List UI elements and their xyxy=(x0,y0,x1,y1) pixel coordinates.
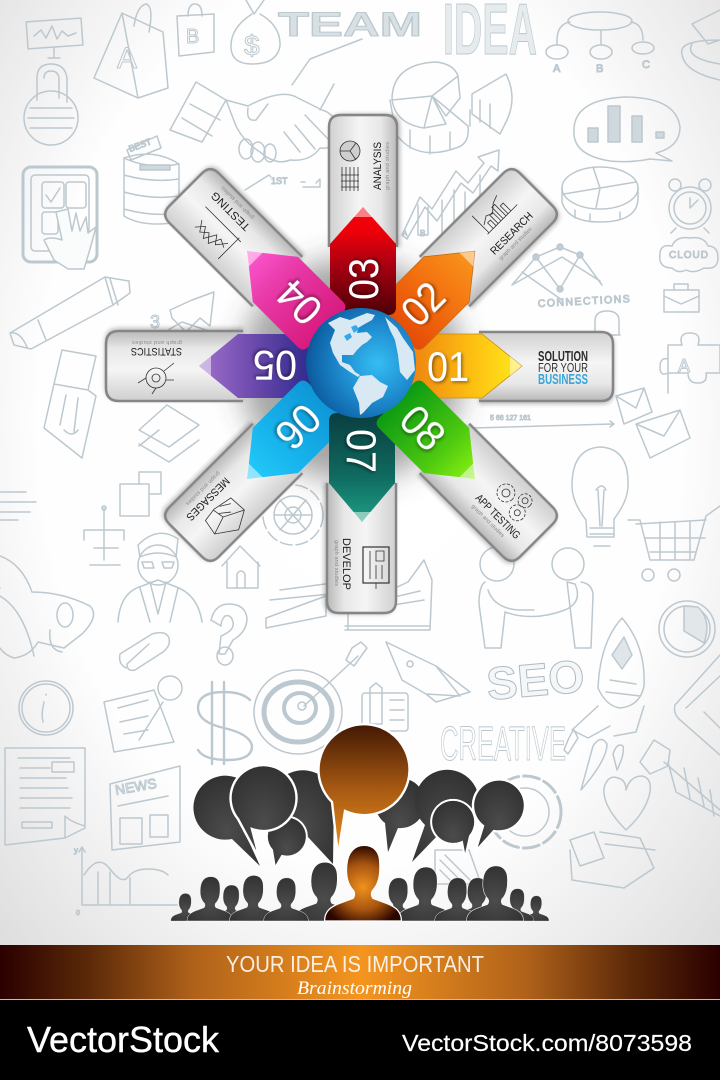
crowd with speech bubbles xyxy=(171,724,549,921)
doodle: arrow box: 3 xyxy=(150,312,160,332)
footer xyxy=(0,1000,720,1080)
doodle: puzzle: A xyxy=(678,356,690,376)
doodle: shopping bag A: A xyxy=(117,42,137,75)
doodle: axis chart xyxy=(472,415,614,428)
doodle: growth arrow xyxy=(402,150,499,240)
doodle: 1st marker xyxy=(245,175,320,190)
doodle: alarm clock xyxy=(669,179,711,233)
footer logo: VectorStock xyxy=(27,1019,220,1060)
speech bubble group: left dark bubbles xyxy=(193,765,334,868)
card 08: app testing: APP TESTING xyxy=(473,492,522,542)
doodle: document xyxy=(5,748,85,845)
arrow 02 xyxy=(374,229,497,352)
doodle: target with arrow xyxy=(254,642,367,754)
banner title: YOUR IDEA IS IMPORTANT xyxy=(226,951,484,977)
doodle: growth arrow: A xyxy=(402,229,408,238)
doodle: books xyxy=(266,560,432,630)
arrow 07: 07 xyxy=(338,429,385,473)
card 07: develop: DEVELOP xyxy=(340,538,352,590)
doodle: shopping cart xyxy=(628,506,720,581)
doodle: growth arrow: B xyxy=(420,229,425,238)
doodle: TEAM lettering: TEAM xyxy=(278,6,422,44)
arrow 05: 05 xyxy=(253,342,297,389)
doodle: math graph: y xyxy=(74,846,78,855)
doodle: shopping bag A xyxy=(94,4,168,98)
arrow 06 xyxy=(225,378,348,501)
doodle: house xyxy=(222,546,260,588)
arrow 07 xyxy=(329,413,395,522)
card 06: messages: graph and studies xyxy=(184,470,221,507)
doodle: notes and pen xyxy=(570,832,655,888)
doodle: math graph xyxy=(74,846,177,917)
doodle: tree chart xyxy=(84,506,124,565)
orange speech bubble xyxy=(319,724,410,856)
doodle: dollar sign xyxy=(198,682,252,764)
banner xyxy=(0,945,720,1000)
doodle: pencil xyxy=(10,277,130,349)
arrow 04: 04 xyxy=(267,270,331,335)
doodle: pie chart xyxy=(390,62,512,154)
doodle: layers xyxy=(139,405,199,462)
card 07: develop xyxy=(327,483,396,613)
doodle: shopping bag B: B xyxy=(186,26,199,48)
doodle: money bag: $ xyxy=(244,30,260,61)
doodle: arrow box xyxy=(150,292,214,332)
doodle: men shaking hands xyxy=(479,547,593,648)
doodle: light bulb xyxy=(572,447,628,546)
doodle: drops xyxy=(564,730,623,790)
doodle: shopping bag B xyxy=(177,4,214,56)
doodle: gear xyxy=(263,485,323,545)
card 07: develop: graph and studies xyxy=(333,540,339,586)
arrow 08 xyxy=(374,378,497,501)
card 03: analysis: graph and studies xyxy=(385,142,391,190)
card 05: statistics: graph and studies xyxy=(132,339,182,345)
doodle: monitor and padlock xyxy=(24,18,83,145)
doodle: speech bubble bars xyxy=(574,97,680,162)
doodle: squares xyxy=(120,472,161,516)
card 03: analysis xyxy=(329,115,397,247)
doodle: news: NEWS xyxy=(114,775,158,798)
doodle: org chart xyxy=(546,12,654,75)
solution for your business label: FOR YOUR xyxy=(538,360,588,375)
arrow 01 xyxy=(411,334,522,398)
solution for your business label: BUSINESS xyxy=(538,371,588,388)
doodle: math graph: 0 xyxy=(76,910,80,917)
card 04: testing: TESTING xyxy=(209,189,253,233)
infographic: eight numbered arms xyxy=(106,115,613,613)
card 06: messages: MESSAGES xyxy=(184,475,232,523)
speech bubble group: right dark bubbles xyxy=(375,770,525,862)
doodle: org chart: C xyxy=(642,59,650,71)
doodle: notepad with pencil xyxy=(362,683,408,731)
doodle: envelopes xyxy=(616,388,690,458)
audience silhouettes xyxy=(171,862,549,921)
doodle: paperclip xyxy=(120,633,169,670)
arrow 03 xyxy=(330,207,396,315)
arrow 04 xyxy=(225,229,348,352)
doodle: handshake xyxy=(170,39,362,162)
doodle: cloud: CLOUD xyxy=(669,250,709,261)
doodle: magnifier and tie xyxy=(640,740,720,816)
doodle: heart xyxy=(604,776,650,830)
doodle: 1st marker: 1ST xyxy=(271,176,288,186)
doodle: cloud xyxy=(660,238,718,272)
doodle: money bag xyxy=(231,0,280,64)
card 05: statistics xyxy=(106,331,243,401)
solution for your business label: SOLUTION xyxy=(538,348,588,365)
doodle: axis chart: 5 66 127 161 xyxy=(490,415,531,422)
doodle: network connections: CONNECTIONS xyxy=(538,293,630,310)
solution for your business label xyxy=(538,348,588,388)
card 02: research: RESEARCH xyxy=(488,210,536,258)
orange central person xyxy=(325,845,401,921)
doodle: server best: BEST xyxy=(127,136,153,154)
doodle: rocket shuttle xyxy=(0,556,94,658)
banner subtitle: Brainstorming xyxy=(297,978,412,999)
card 03: analysis: ANALYSIS xyxy=(372,142,384,190)
footer url: VectorStock.com/8073598 xyxy=(402,1030,692,1056)
card 04: testing: graph and studies xyxy=(220,185,256,220)
card 05: statistics: STATISTICS xyxy=(131,345,182,357)
card 04: testing xyxy=(161,165,302,306)
card 08: app testing: graph and studies xyxy=(470,504,505,539)
doodle: network connections xyxy=(512,244,630,310)
card 08: app testing xyxy=(420,424,561,565)
doodle: pie circle xyxy=(659,601,715,657)
doodle: tablet right xyxy=(674,655,720,755)
doodle: man with sunglasses xyxy=(118,533,202,622)
doodle: org chart: B xyxy=(596,63,603,75)
globe xyxy=(306,308,416,418)
doodle: question mark xyxy=(211,604,247,665)
doodle: SEO lettering: SEO xyxy=(484,650,586,710)
doodle: tablet with hand xyxy=(23,167,97,269)
doodle: gear right xyxy=(489,776,561,848)
card 01: solution for your business xyxy=(479,332,613,401)
doodle: 3D pie xyxy=(562,167,638,222)
soft shadow behind the infographic xyxy=(240,258,464,482)
doodle: USB stick xyxy=(44,350,96,458)
arrow 06: 06 xyxy=(266,395,331,459)
arrow 08: 08 xyxy=(391,395,455,460)
doodle: info circle xyxy=(19,681,73,735)
doodle: note with pin xyxy=(104,676,182,752)
arrow 03: 03 xyxy=(340,258,387,300)
doodle: news xyxy=(110,766,180,850)
arrow 05 xyxy=(199,334,311,398)
arrow 01: 01 xyxy=(427,343,469,390)
card 02: research xyxy=(420,165,561,306)
doodle: padlock right xyxy=(568,311,620,335)
doodle: briefcase xyxy=(664,284,699,312)
doodle: curved arrow top right xyxy=(682,10,720,80)
doodle: org chart: A xyxy=(553,63,561,75)
doodle: hatched notebook xyxy=(435,850,481,884)
card 02: research: graph and studies xyxy=(498,226,534,262)
card 06: messages xyxy=(161,424,302,565)
doodle: side lines xyxy=(0,492,36,520)
doodle: puzzle xyxy=(660,333,720,393)
doodle: rocket xyxy=(572,618,644,738)
doodle: laptop xyxy=(386,642,470,702)
doodle: CREATIVE lettering: CREATIVE xyxy=(440,718,566,771)
arrow 02: 02 xyxy=(391,272,454,335)
doodle: server best xyxy=(124,136,179,224)
